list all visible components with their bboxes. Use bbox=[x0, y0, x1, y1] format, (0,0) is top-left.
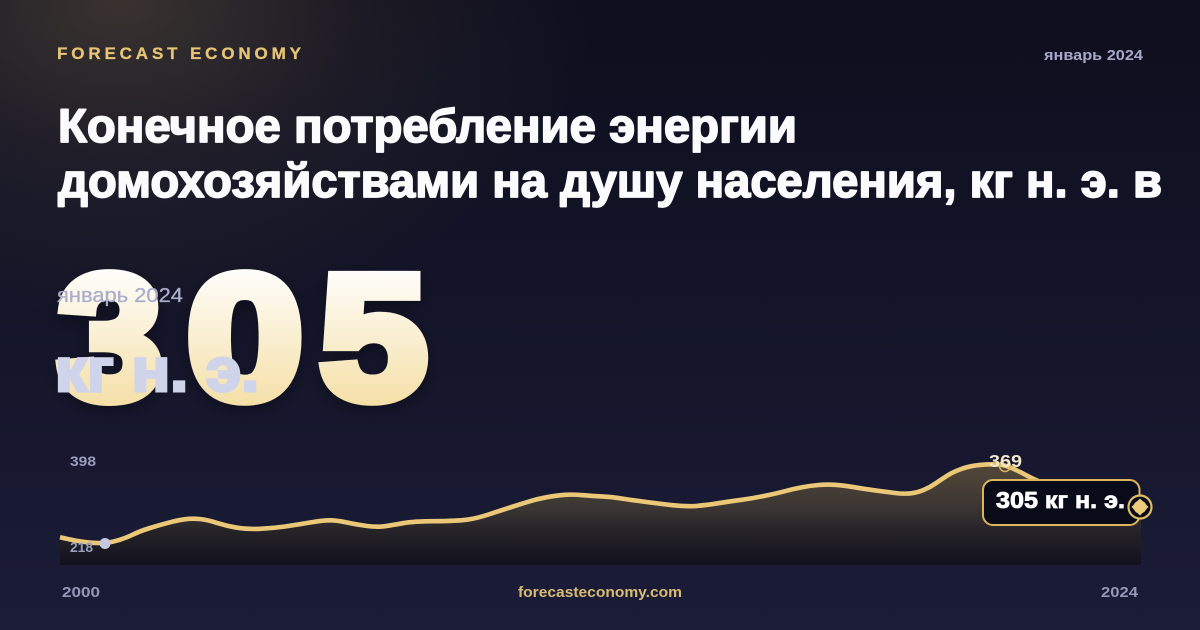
current value callout: 305 кг н. э. bbox=[996, 487, 1125, 513]
current value marker bbox=[1128, 496, 1152, 518]
big value 305: 0 bbox=[187, 240, 303, 436]
axis min label: 218 bbox=[70, 539, 93, 555]
minimum marker bbox=[100, 538, 110, 549]
current value callout bbox=[983, 480, 1140, 525]
end year: 2024 bbox=[1101, 584, 1139, 601]
peak value label: 369 bbox=[989, 451, 1022, 471]
big value 305: 5 bbox=[320, 240, 427, 436]
date top right: январь 2024 bbox=[1044, 47, 1144, 64]
gold data line bbox=[60, 464, 1140, 543]
source site: forecasteconomy.com bbox=[518, 585, 682, 601]
big value 305: 3 bbox=[58, 240, 162, 436]
maximum marker bbox=[1000, 460, 1010, 472]
period label overlay: январь 2024 bbox=[57, 285, 183, 307]
unit label overlay: кг н. э. bbox=[55, 336, 259, 404]
axis max label: 398 bbox=[70, 453, 96, 469]
start year: 2000 bbox=[62, 584, 100, 601]
brand kicker: FORECAST ECONOMY bbox=[57, 44, 302, 63]
title: Конечное потребление энергии bbox=[58, 100, 797, 153]
title: домохозяйствами на душу населения, кг н. э. в bbox=[58, 155, 1162, 208]
area under line bbox=[60, 464, 1141, 565]
title bbox=[58, 100, 1162, 208]
line chart bbox=[60, 451, 1152, 565]
big value 305 bbox=[58, 240, 427, 436]
